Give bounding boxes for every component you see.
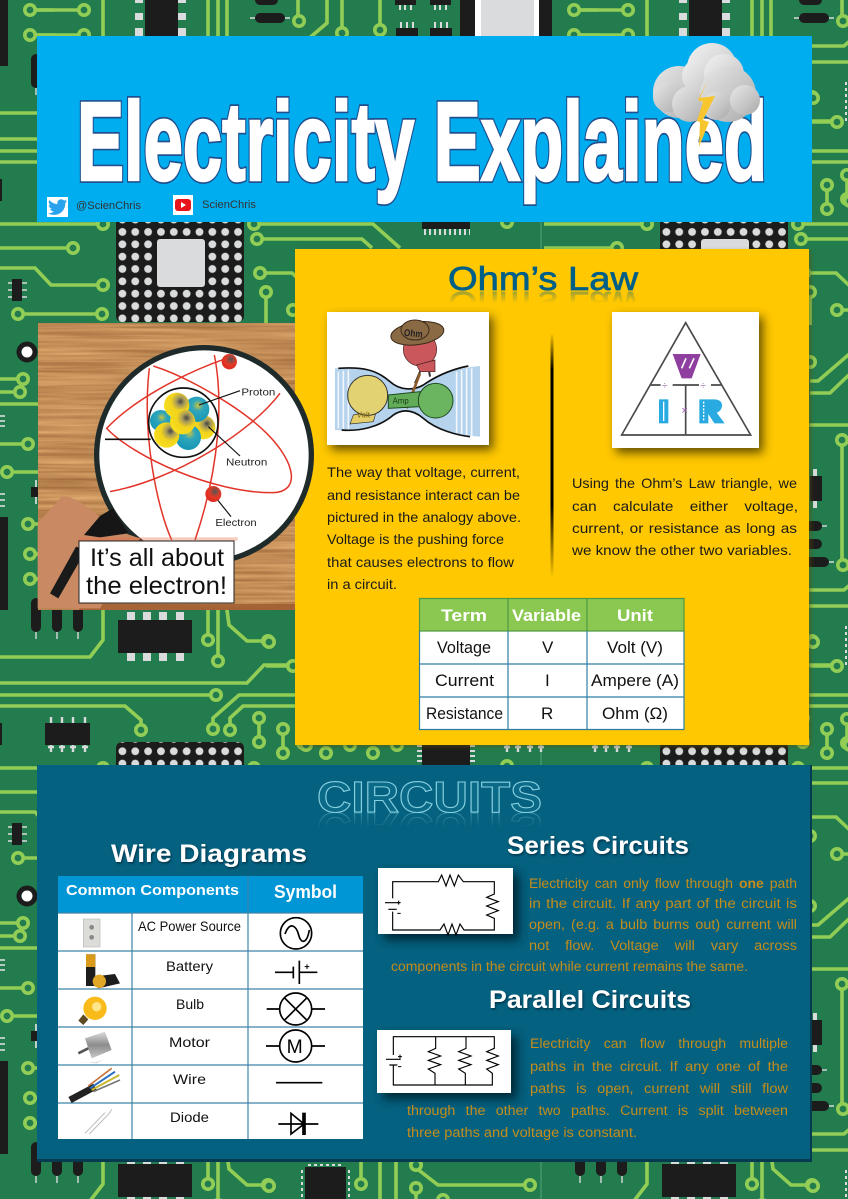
text: analogy description: and resistance interact can be xyxy=(327,487,520,503)
symbol: diode xyxy=(278,1113,318,1135)
youtube name: ScienChris xyxy=(202,199,257,211)
divider xyxy=(550,333,554,578)
text: parallel description: paths is open, current will still flow xyxy=(530,1081,788,1096)
text: parallel description: through the other two paths. Current is split between xyxy=(407,1103,788,1118)
table: common components: Common Components xyxy=(66,882,239,899)
text: analogy description xyxy=(327,464,521,592)
symbol: bulb xyxy=(267,993,325,1025)
text: series description: in the circuit. If any part of the circuit is xyxy=(529,896,797,911)
magnifying glass with atom xyxy=(38,348,311,608)
image: volt amp ohm cartoon xyxy=(327,312,493,450)
table: term, variable, unit: Resistance xyxy=(426,704,503,723)
panel: Ohm's Law xyxy=(295,249,811,747)
icon: outlet xyxy=(83,919,100,947)
magnifying glass with atom: Electron xyxy=(215,518,257,529)
text: series description: components in the circuit while current remains the same. xyxy=(391,959,748,974)
table: term, variable, unit: Ampere (A) xyxy=(591,671,679,690)
callout: all about the electron: It’s all about xyxy=(90,544,224,572)
diagram: series circuit xyxy=(378,868,519,940)
icon: bulb xyxy=(78,997,107,1025)
table: term, variable, unit: Unit xyxy=(617,606,653,625)
text: analogy description: that causes electrons to flow xyxy=(327,554,515,570)
symbol: battery xyxy=(275,961,317,984)
text: triangle description: can calculate either voltage, xyxy=(572,498,798,514)
symbol: wire xyxy=(276,1080,322,1085)
text: parallel description xyxy=(407,1036,788,1140)
table: term, variable, unit: Term xyxy=(441,606,487,625)
text: analogy description: pictured in the analogy above. xyxy=(327,509,521,525)
symbol: motor xyxy=(266,1030,325,1062)
panel: circuits xyxy=(37,765,812,1162)
image: volt amp ohm cartoon: Volt xyxy=(357,410,371,419)
image: Ohm's law triangle: × xyxy=(681,405,688,417)
table: common components: Bulb xyxy=(176,996,204,1012)
diagram: parallel circuit xyxy=(377,1030,517,1099)
panel: title banner xyxy=(37,36,812,222)
symbol: motor: M xyxy=(287,1037,303,1058)
panel: atom image xyxy=(38,323,311,610)
text: parallel description: Electricity can flow through multiple xyxy=(530,1036,788,1051)
table: term, variable, unit: Ohm (Ω) xyxy=(602,704,668,723)
text: triangle description: Using the Ohm’s Law triangle, we xyxy=(572,475,797,491)
hand holding handle xyxy=(38,496,238,608)
image: Ohm's law triangle: ÷ xyxy=(662,381,668,392)
text: analogy description: Voltage is the pushing force xyxy=(327,531,504,547)
text: triangle description: we know the other two variables. xyxy=(571,542,792,558)
heading: Ohm's Law: Ohm’s Law xyxy=(448,260,638,297)
table: term, variable, unit: Variable xyxy=(512,606,581,625)
symbol: AC source xyxy=(280,918,312,949)
table: term, variable, unit: Voltage xyxy=(437,638,491,657)
text: series description: not flow. Voltage will vary across xyxy=(529,938,797,953)
text: triangle description xyxy=(571,475,798,558)
table: term, variable, unit: V xyxy=(542,638,554,657)
table: common components xyxy=(58,876,363,1139)
table: term, variable, unit: I xyxy=(545,671,550,690)
text: series description: Electricity can only flow through one path xyxy=(529,876,797,891)
image: volt amp ohm cartoon: Ohm xyxy=(403,328,423,340)
text: triangle description: current, or resistance as long as xyxy=(572,520,797,536)
table: common components: AC Power Source xyxy=(138,918,241,934)
callout: all about the electron xyxy=(79,541,234,603)
magnifying glass with atom: Proton xyxy=(241,388,276,399)
table: common components: Diode xyxy=(170,1109,209,1125)
table: term, variable, unit: R xyxy=(541,704,553,723)
heading: series circuits: Series Circuits xyxy=(507,832,689,860)
table: common components: Motor xyxy=(169,1034,210,1050)
text: series description xyxy=(391,876,797,974)
table: term, variable, unit: Volt (V) xyxy=(607,638,663,657)
table: common components: Battery xyxy=(166,958,213,974)
icon: twitter xyxy=(47,197,68,217)
text: parallel description: three paths and voltage is constant. xyxy=(407,1125,637,1140)
text: analogy description: The way that voltage, current, xyxy=(327,464,520,480)
icon: motor xyxy=(78,1032,112,1063)
table: common components: Symbol xyxy=(274,882,337,902)
table: common components: Wire xyxy=(173,1071,206,1087)
icon: wire xyxy=(70,1068,120,1100)
heading: circuits: CIRCUITS xyxy=(317,773,542,822)
text: parallel description: paths in the circuit. If any one of the xyxy=(530,1059,788,1074)
text: analogy description: in a circuit. xyxy=(327,576,397,592)
image: Ohm's law triangle: ÷ xyxy=(700,381,706,392)
table: term, variable, unit xyxy=(420,598,684,730)
icon: battery xyxy=(86,954,120,988)
heading: parallel circuits: Parallel Circuits xyxy=(489,986,691,1014)
image: volt amp ohm cartoon: Amp xyxy=(393,396,409,405)
heading: wire diagrams: Wire Diagrams xyxy=(111,840,307,868)
icon: diode xyxy=(85,1109,112,1134)
icon: youtube xyxy=(173,195,193,215)
text: series description: open, (e.g. a bulb burns out) current will xyxy=(529,917,797,932)
callout: all about the electron: the electron! xyxy=(86,572,227,600)
image: Ohm's law triangle xyxy=(612,312,763,453)
twitter handle: @ScienChris xyxy=(76,200,141,212)
table: term, variable, unit: Current xyxy=(435,671,494,690)
magnifying glass with atom: Neutron xyxy=(226,458,268,469)
icon: storm cloud xyxy=(653,43,760,147)
